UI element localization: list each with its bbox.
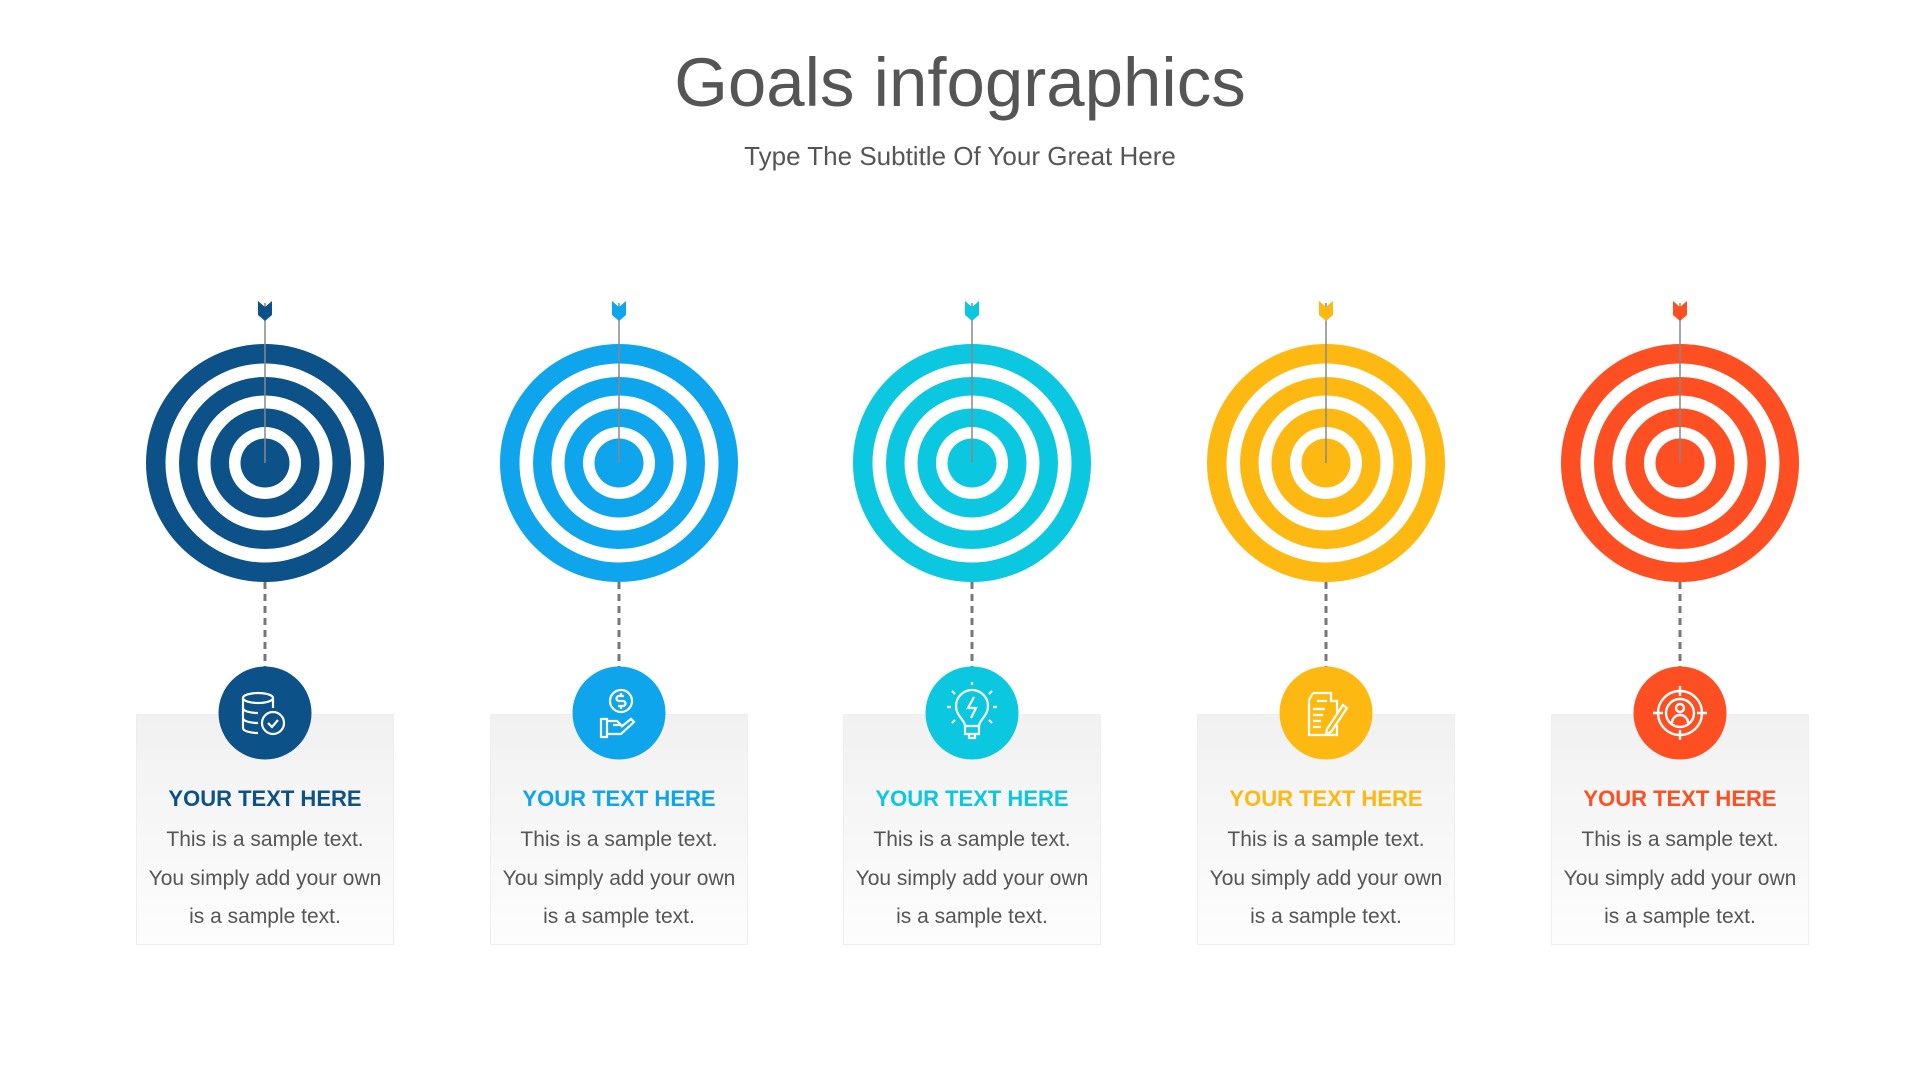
- subtitle: Type The Subtitle Of Your Great Here: [744, 141, 1176, 171]
- panel: goal 4: This is a sample text.: [1227, 828, 1425, 851]
- panel: goal 3: You simply add your own: [856, 866, 1088, 890]
- panel: goal 5: [1551, 301, 1809, 945]
- target 1: [146, 301, 384, 760]
- panel: goal 2: You simply add your own: [503, 866, 735, 890]
- panel: goal 4: is a sample text.: [1250, 905, 1402, 928]
- panel: goal 2: YOUR TEXT HERE: [522, 786, 716, 811]
- panel: goal 3: YOUR TEXT HERE: [875, 786, 1069, 811]
- target 2: [500, 301, 738, 760]
- panel: goal 1: is a sample text.: [189, 905, 341, 928]
- panel: goal 3: This is a sample text.: [873, 828, 1071, 851]
- panel: goal 4: [1197, 301, 1455, 945]
- panel: goal 2: [490, 301, 748, 945]
- title: Goals infographics: [674, 44, 1246, 121]
- panel: goal 1: YOUR TEXT HERE: [168, 786, 362, 811]
- target 5: [1561, 301, 1799, 760]
- panel: goal 1: You simply add your own: [149, 866, 381, 890]
- target 3: [853, 301, 1091, 760]
- panel: goal 3: is a sample text.: [896, 905, 1048, 928]
- panel: goal 2: This is a sample text.: [520, 828, 718, 851]
- panel: goal 4: YOUR TEXT HERE: [1229, 786, 1423, 811]
- panel: goal 1: This is a sample text.: [166, 828, 364, 851]
- panel: goal 1: [136, 301, 394, 945]
- panel: goal 4: You simply add your own: [1210, 866, 1442, 890]
- panel: goal 5: This is a sample text.: [1581, 828, 1779, 851]
- target 4: [1207, 301, 1445, 760]
- panel: goal 3: [843, 301, 1101, 945]
- panel: goal 5: is a sample text.: [1604, 905, 1756, 928]
- panel: goal 2: is a sample text.: [543, 905, 695, 928]
- panel: goal 5: YOUR TEXT HERE: [1583, 786, 1777, 811]
- panel: goal 5: You simply add your own: [1564, 866, 1796, 890]
